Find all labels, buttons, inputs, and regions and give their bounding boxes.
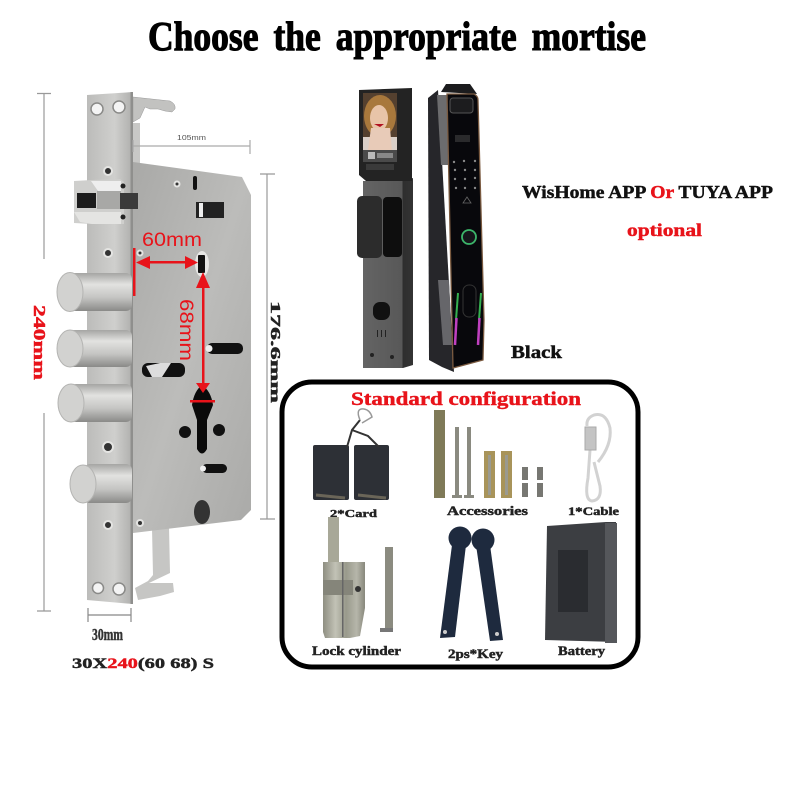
bottom hook [135, 526, 174, 600]
head unit [359, 88, 412, 181]
label 240mm: 240mm [30, 305, 49, 380]
label: accessories: Accessories [447, 504, 528, 518]
label: cable: 1*Cable [568, 506, 619, 518]
cylinder bolts [57, 272, 132, 503]
latch bolt [74, 179, 138, 224]
euro keyhole [192, 385, 213, 454]
side handle outline [463, 285, 476, 317]
mortise lock diagram [30, 92, 282, 672]
handle [357, 196, 382, 258]
icon: accessories [434, 410, 543, 498]
screen portrait [363, 93, 397, 137]
label: lock cylinder: Lock cylinder [312, 644, 402, 658]
LED strips [456, 293, 458, 320]
faceplate [87, 92, 133, 604]
case slots [142, 176, 243, 524]
speaker and screws [370, 330, 394, 359]
icon: battery [545, 522, 617, 643]
label 30mm: 30mm [92, 625, 123, 644]
lock case [133, 162, 251, 533]
smart lock front panel [357, 88, 413, 368]
top hook [133, 97, 175, 122]
red dimension arrows [133, 248, 215, 402]
icon: keys [440, 526, 503, 641]
dimension line: overall height [37, 94, 51, 611]
label 105mm: 105mm [177, 135, 206, 142]
optional label: optional [627, 220, 702, 240]
colour label: Black [511, 342, 562, 362]
keypad dots [453, 160, 476, 189]
icon: cards [313, 409, 389, 500]
label: battery: Battery [558, 644, 606, 658]
dimension line: case height [260, 174, 275, 519]
label: keys: 2ps*Key [448, 647, 504, 661]
panel heading: Standard configuration [351, 389, 582, 410]
app label: WisHome APP Or TUYA APP [522, 182, 773, 202]
keyhole window [373, 302, 390, 320]
panel: standard configuration [282, 382, 638, 667]
icon: cable [585, 415, 610, 501]
fingerprint ring [462, 230, 476, 244]
mounting holes [91, 101, 125, 595]
dimension line: 30mm [88, 608, 131, 622]
dimension line: 105mm [133, 140, 250, 154]
label 60mm: 60mm [142, 230, 202, 251]
title: Choose the appropriate mortise [148, 13, 646, 59]
model code: 30X 240 (60 68) S [72, 656, 214, 672]
label: card: 2*Card [330, 508, 377, 520]
label 68mm: 68mm [175, 299, 196, 361]
smart lock side panel [428, 84, 484, 372]
label 176.6mm: 176.6mm [267, 301, 282, 404]
icon: lock cylinder [323, 517, 393, 638]
camera window [450, 98, 473, 113]
